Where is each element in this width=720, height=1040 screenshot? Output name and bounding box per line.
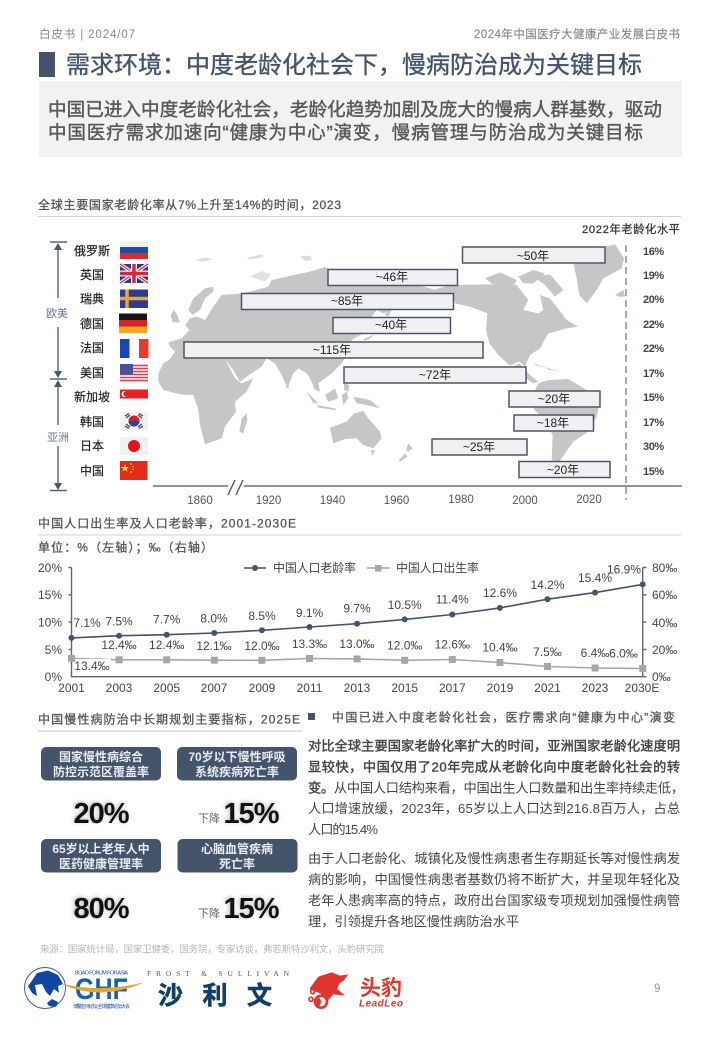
birth rate data labels: 13.3‰	[292, 637, 327, 651]
country names: 德国	[80, 316, 104, 331]
aging rate data labels: 15.4%	[578, 571, 612, 585]
timeline axis: 1920	[256, 495, 281, 507]
analysis paragraph 1	[308, 738, 684, 837]
2022 aging level column: 22%	[643, 343, 664, 355]
heading: birth and aging rates: 中国人口出生率及人口老龄率，2001-2030E	[38, 516, 296, 530]
2022 aging level column	[582, 222, 680, 478]
birth rate data labels: 13.0‰	[339, 637, 375, 651]
analysis paragraph 1: 人口的15.4%	[308, 822, 378, 837]
logo: Boao Forum GHF	[24, 968, 142, 1010]
logo: Boao Forum GHF: GHF	[75, 973, 128, 1006]
x axis labels: 2005	[153, 681, 180, 695]
KPI card: cardiovascular mortality: 心脑血管疾病	[201, 841, 273, 856]
right axis labels: 40‰	[652, 616, 677, 630]
timeline axis: 1940	[320, 495, 345, 507]
KPI card: chronic respiratory mortality: 70岁以下慢性呼吸	[188, 749, 286, 764]
summary panel	[39, 81, 682, 157]
flag: Russia	[120, 242, 148, 259]
timeline bar labels: ~20年	[547, 463, 579, 477]
logo: Frost & Sullivan: FROST & SULLIVAN	[147, 969, 290, 978]
summary panel: 中国已进入中度老龄化社会，老龄化趋势加剧及庞大的慢病人群基数，驱动	[48, 99, 662, 120]
flag: Germany	[119, 314, 147, 333]
timeline bars	[184, 247, 610, 478]
KPI card: cardiovascular mortality: 15%	[223, 893, 280, 925]
birth rate data labels: 12.4‰	[101, 638, 137, 652]
left axis labels: 0%	[45, 670, 62, 684]
KPI card: cardiovascular mortality: 死亡率	[219, 856, 255, 871]
x axis labels: 2030E	[625, 681, 659, 695]
legend: 中国人口老龄率	[273, 560, 356, 575]
KPI card: chronic respiratory mortality: 下降	[198, 811, 220, 825]
timeline bar labels: ~25年	[463, 440, 495, 454]
line chart: aging and birth rates	[38, 560, 677, 695]
country names: 俄罗斯	[74, 244, 110, 258]
KPI card: elderly health management: 医药健康管理率	[59, 856, 143, 871]
aging rate data labels: 12.6%	[483, 586, 517, 600]
KPI card: cardiovascular mortality: 下降	[198, 906, 220, 920]
KPI card: chronic respiratory mortality: 15%	[223, 798, 280, 830]
birth rate series	[68, 655, 646, 673]
birth rate data labels: 6.4‰	[581, 646, 609, 660]
aging rate data labels: 11.4%	[436, 592, 469, 606]
2022 aging level column: 20%	[643, 294, 664, 306]
source note: 来源：国家统计局，国家卫健委，国务院，专家访谈，弗若斯特沙利文，头豹研究院	[40, 944, 384, 956]
KPI card: chronic respiratory mortality: 系统疾病死亡率	[195, 764, 279, 779]
left axis labels: 20%	[38, 561, 62, 575]
title: 需求环境：中度老龄化社会下，慢病防治成为关键目标	[66, 52, 642, 79]
timeline axis	[153, 480, 682, 507]
analysis paragraph 1: 显较快，中国仅用了20年完成从老龄化向中度老龄化社会的转	[308, 760, 680, 774]
right axis labels: 80‰	[652, 561, 677, 575]
analysis paragraph 2: 老年人患病率高的特点，政府出台国家级专项规划加强慢性病管	[308, 892, 680, 908]
x axis labels	[58, 681, 659, 695]
x axis labels: 2011	[297, 681, 323, 695]
2022 aging level column: 17%	[643, 417, 664, 429]
birth rate data labels: 12.4‰	[149, 638, 184, 652]
analysis paragraph 2: 由于人口老龄化、城镇化及慢性病患者生存期延长等对慢性病发	[308, 850, 680, 866]
2022 aging level column: 17%	[643, 368, 664, 380]
x axis labels: 2007	[201, 681, 228, 695]
logo: Boao Forum GHF: 博鳌亚洲论坛·全球健康论坛大会	[73, 1003, 130, 1010]
2022 aging level column: 30%	[643, 441, 664, 453]
x axis labels: 2001	[58, 681, 85, 695]
logo: LeadLeo: LeadLeo	[359, 998, 403, 1010]
2022 reference dashed line	[625, 245, 627, 500]
analysis paragraph 2	[308, 850, 680, 929]
timeline axis: 2020	[576, 494, 602, 506]
country names: 瑞典	[80, 292, 104, 306]
timeline axis: 1980	[448, 494, 474, 506]
birth rate data labels: 12.6‰	[435, 638, 470, 652]
right axis labels: 20‰	[652, 643, 677, 657]
aging rate data labels: 7.1%	[73, 616, 101, 630]
country names: 新加坡	[74, 389, 110, 404]
birth rate data labels: 7.5‰	[533, 645, 562, 659]
2022 aging level column: 22%	[643, 319, 664, 331]
x axis labels: 2023	[582, 681, 609, 695]
KPI card: elderly health management	[41, 839, 161, 925]
x axis labels: 2015	[391, 681, 418, 695]
group arrows: Europe & America / Asia	[46, 242, 69, 490]
KPI card: elderly health management: 80%	[73, 893, 130, 925]
aging rate data labels: 14.2%	[530, 578, 565, 592]
heading: analysis: 中国已进入中度老龄化社会，医疗需求向“健康为中心”演变	[332, 710, 675, 724]
heading: chronic disease plan indicators: 中国慢性病防治中长期规划主要指标，2025E	[38, 712, 300, 726]
logo: Frost & Sullivan: 沙利文	[158, 982, 272, 1010]
analysis paragraph 1: 对比全球主要国家老龄化率扩大的时间，亚洲国家老龄化速度明	[308, 738, 680, 754]
birth rate data labels: 10.4‰	[482, 640, 518, 654]
aging rate data labels: 8.0%	[200, 612, 228, 626]
x axis labels: 2017	[439, 681, 466, 695]
analysis paragraph 2: 病的影响，中国慢性病患者基数仍将不断扩大，并呈现年轻化及	[308, 871, 680, 887]
timeline bar labels: ~18年	[537, 416, 569, 430]
country names: 韩国	[80, 414, 104, 429]
timeline axis: 2000	[512, 495, 538, 507]
birth rate data labels	[74, 637, 638, 673]
KPI card: national demonstration zone coverage: 防控示范区覆盖率	[53, 764, 149, 779]
KPI card: national demonstration zone coverage: 国家慢性病综合	[59, 749, 143, 764]
KPI card: national demonstration zone coverage: 20%	[73, 798, 130, 830]
aging rate data labels: 10.5%	[388, 598, 422, 612]
legend	[244, 560, 479, 575]
aging rate data labels: 7.5%	[105, 614, 133, 628]
flag: France	[120, 339, 148, 358]
left axis labels: 10%	[38, 616, 62, 630]
country names: 美国	[80, 366, 104, 380]
birth rate data labels: 6.0‰	[609, 646, 638, 660]
logo: Boao Forum GHF: BOAO FORUM FOR ASIA	[75, 970, 128, 976]
timeline axis: 1860	[187, 495, 213, 507]
x axis labels: 2021	[534, 681, 561, 695]
chart unit: 单位：%（左轴）；‰（右轴）	[38, 540, 213, 554]
group arrows: Europe & America / Asia: 亚洲	[47, 432, 69, 444]
flag: Sweden	[120, 290, 148, 308]
timeline bar labels: ~50年	[517, 249, 549, 263]
2022 aging level column: 2022年老龄化水平	[582, 222, 680, 236]
flag: Singapore	[120, 390, 148, 406]
heading marker	[308, 713, 315, 720]
x axis labels: 2013	[344, 681, 371, 695]
2022 aging level column: 16%	[643, 246, 664, 258]
birth rate data labels: 12.1‰	[196, 639, 232, 653]
aging rate series	[68, 581, 646, 641]
analysis paragraph 1: 人口增速放缓，2023年，65岁以上人口达到216.8百万人，占总	[308, 801, 680, 816]
aging rate data labels: 9.7%	[343, 602, 371, 616]
summary panel: 中国医疗需求加速向“健康为中心”演变，慢病管理与防治成为关键目标	[48, 122, 643, 143]
timeline bar labels: ~85年	[331, 294, 363, 308]
flag: South Korea	[120, 412, 148, 430]
birth rate data labels: 13.4‰	[74, 659, 110, 673]
heading: global aging time: 全球主要国家老龄化率从7%上升至14%的时间，2023	[38, 197, 341, 212]
analysis paragraph 1: 变。从中国人口结构来看，中国出生人口数量和出生率持续走低，	[308, 780, 684, 796]
timeline bar labels: ~20年	[538, 392, 570, 406]
title marker	[39, 52, 55, 77]
flag: USA	[120, 364, 148, 383]
right axis labels: 0‰	[652, 670, 671, 684]
x axis labels: 2019	[487, 681, 514, 695]
KPI card: cardiovascular mortality	[178, 839, 298, 925]
analysis paragraph 2: 理，引领提升各地区慢性病防治水平	[308, 913, 519, 929]
x axis labels: 2009	[249, 681, 276, 695]
aging rate data labels	[73, 562, 641, 630]
header: left report tag: 白皮书 | 2024/07	[39, 27, 135, 41]
left axis labels: 15%	[38, 588, 62, 602]
logo: LeadLeo: 头豹	[360, 977, 402, 1000]
timeline bar labels: ~72年	[419, 368, 451, 382]
country names: 中国	[80, 463, 104, 478]
country names: 英国	[80, 268, 104, 282]
timeline bar labels: ~40年	[375, 318, 407, 332]
country names	[74, 244, 110, 478]
world map	[158, 244, 625, 462]
group arrows: Europe & America / Asia: 欧美	[46, 307, 68, 320]
aging rate data labels: 8.5%	[248, 609, 276, 623]
right axis labels	[652, 561, 677, 684]
2022 aging level column: 15%	[643, 466, 664, 478]
left axis labels	[38, 561, 62, 684]
aging rate data labels: 16.9%	[607, 562, 641, 576]
KPI card: elderly health management: 65岁以上老年人中	[52, 841, 150, 856]
flag: UK	[120, 264, 148, 283]
right axis labels: 60‰	[652, 588, 677, 602]
KPI card: chronic respiratory mortality	[177, 747, 297, 830]
flag: Japan	[120, 437, 148, 455]
birth rate data labels: 12.0‰	[244, 639, 280, 653]
aging rate data labels: 9.1%	[296, 606, 324, 620]
logo: Frost & Sullivan	[147, 969, 290, 1010]
header: right report name: 2024年中国医疗大健康产业发展白皮书	[474, 27, 680, 41]
timeline axis: 1960	[384, 495, 409, 507]
legend: 中国人口出生率	[396, 560, 479, 575]
timeline bar labels: ~115年	[313, 343, 351, 357]
page number: 9	[654, 983, 660, 995]
birth rate data labels: 12.0‰	[387, 638, 422, 652]
timeline bar labels	[313, 249, 579, 477]
2022 aging level column: 15%	[643, 392, 664, 404]
timeline bar labels: ~46年	[376, 270, 408, 284]
logo: LeadLeo	[309, 972, 403, 1010]
x axis labels: 2003	[106, 681, 133, 695]
aging rate data labels: 7.7%	[153, 612, 181, 626]
2022 aging level column: 19%	[643, 270, 664, 282]
flag: China	[120, 461, 148, 480]
left axis labels: 5%	[45, 643, 62, 657]
country names: 日本	[80, 439, 104, 453]
KPI card: national demonstration zone coverage	[41, 747, 161, 830]
country names: 法国	[80, 341, 104, 355]
